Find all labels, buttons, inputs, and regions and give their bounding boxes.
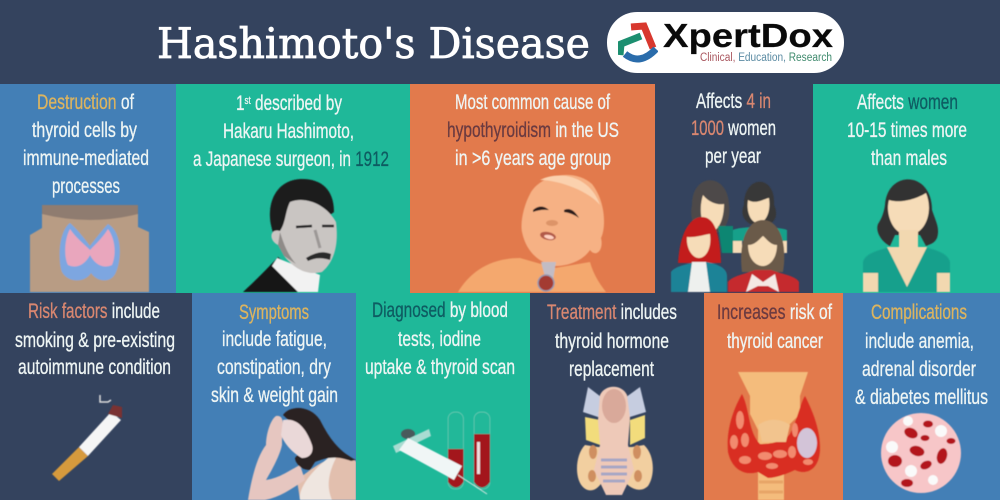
logo tagline: Clinical, Education, Research	[700, 52, 832, 64]
panel text: constipation, dry	[217, 356, 331, 379]
panel: symptoms	[192, 293, 356, 500]
panel text	[23, 91, 149, 198]
panel text	[717, 301, 832, 353]
panel text: per year	[705, 145, 761, 168]
panel: destruction of thyroid cells	[0, 84, 176, 293]
panel text: Affects 4 in	[696, 90, 771, 113]
panel text	[855, 301, 988, 409]
panel text: tests, iodine	[398, 328, 481, 351]
panel text	[365, 299, 515, 379]
icon: neck with thyroid	[30, 205, 149, 292]
panel text: st	[245, 95, 251, 107]
panel text: processes	[52, 175, 120, 198]
panel: first described by Hashimoto	[176, 84, 410, 293]
panel text: than males	[871, 147, 947, 170]
panel text: Complications	[871, 301, 967, 324]
panel text: thyroid hormone	[555, 330, 669, 353]
panel: thyroid cancer	[704, 293, 843, 500]
panel text	[211, 301, 338, 407]
panel text: Most common cause of	[455, 91, 610, 114]
title: Hashimoto's Disease	[157, 19, 590, 68]
panel text: skin & weight gain	[211, 384, 338, 407]
panel: complications	[843, 293, 1000, 500]
icon: syringe and blood tubes	[393, 412, 490, 494]
panel: affects women 10-15 times more	[813, 84, 1000, 293]
illustration: four women	[671, 180, 799, 292]
thyroid marker	[538, 262, 556, 291]
portrait: Hakaru Hashimoto	[243, 179, 337, 292]
icon: blood cells	[881, 413, 961, 493]
woman back right	[733, 182, 787, 253]
logo: XpertDox	[607, 12, 844, 73]
illustration: baby	[458, 175, 606, 292]
panel: risk factors	[0, 293, 192, 500]
syringe	[393, 429, 487, 494]
woman front right	[728, 220, 799, 292]
header band	[0, 0, 1000, 84]
panel text: Treatment includes	[547, 301, 677, 324]
panel text: Diagnosed by blood	[372, 299, 508, 322]
panel: most common cause	[410, 84, 655, 293]
panel text: include fatigue,	[222, 328, 327, 351]
illustration: woman with headache	[248, 408, 356, 500]
panel text: thyroid cancer	[727, 330, 823, 353]
panel text	[547, 301, 677, 381]
panel text	[691, 90, 776, 168]
panel text: in >6 years age group	[455, 147, 611, 170]
panel text: hypothyroidism in the US	[447, 119, 619, 142]
panel text: thyroid cells by	[32, 119, 137, 142]
icon: logo mark	[620, 26, 656, 59]
panel text: replacement	[569, 358, 654, 381]
panel text: a Japanese surgeon, in 1912	[193, 148, 389, 171]
logo wordmark: XpertDox	[663, 17, 834, 54]
panel text: 1	[236, 92, 248, 115]
panel text: immune-mediated	[23, 147, 149, 170]
panel text: uptake & thyroid scan	[365, 356, 515, 379]
panel text: 1000 women	[691, 117, 776, 140]
illustration: woman	[863, 179, 950, 292]
panel text: Increases risk of	[717, 301, 832, 324]
woman front left	[671, 217, 727, 292]
panel text: Hakaru Hashimoto,	[223, 120, 354, 143]
panel text: Affects women	[857, 91, 958, 114]
panel text	[847, 91, 967, 170]
panel text	[15, 300, 175, 379]
panel: treatment	[530, 293, 704, 500]
panel text: described by	[251, 92, 342, 115]
panel text	[447, 91, 619, 170]
icon: cigarette	[52, 395, 122, 481]
panel text: Symptoms	[239, 301, 309, 324]
illustration: thyroid with tumour	[728, 372, 820, 500]
woman back left	[691, 180, 733, 253]
panel text: Risk factors include	[28, 300, 160, 323]
panel text: smoking & pre-existing	[15, 329, 175, 352]
panel: diagnosed	[356, 293, 530, 500]
illustration: thyroid anatomy	[577, 387, 653, 495]
panel text	[193, 92, 389, 171]
panel text: Destruction of	[37, 91, 134, 114]
panel: affects 4 in 1000 women	[655, 84, 813, 293]
blood tubes	[448, 412, 490, 489]
panel text: autoimmune condition	[18, 356, 171, 379]
